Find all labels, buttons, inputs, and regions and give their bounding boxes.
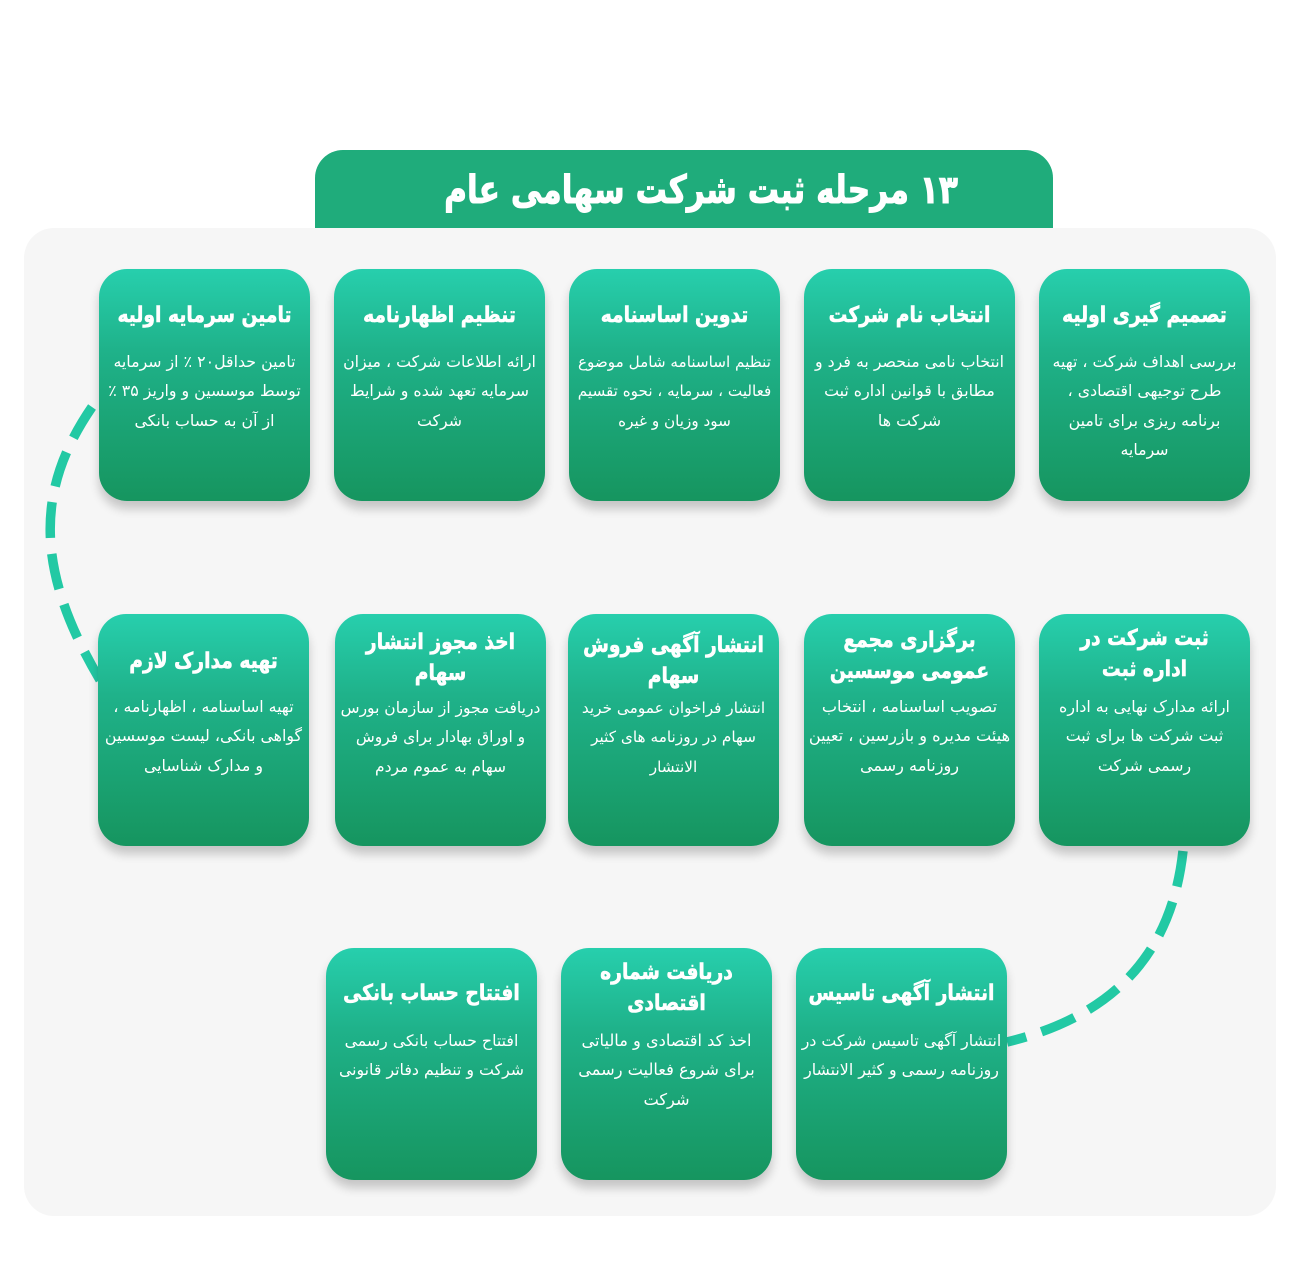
- card 5 heading: تامین سرمایه اولیه: [117, 303, 292, 328]
- card 6 text: ارائه مدارک نهایی به اداره: [1059, 697, 1230, 716]
- card 4 text: [343, 352, 536, 430]
- card 7 text: تصویب اساسنامه ، انتخاب: [822, 697, 997, 716]
- card 8 text: انتشار فراخوان عمومی خرید: [582, 699, 765, 717]
- card 2 text: [814, 352, 1004, 430]
- card 7 text: روزنامه رسمی: [860, 756, 959, 775]
- card 8 text: الانتشار: [650, 758, 697, 776]
- card 4 text: شرکت: [417, 411, 462, 430]
- card 12 text: برای شروع فعالیت رسمی: [578, 1060, 755, 1079]
- card 5 text: [108, 352, 301, 430]
- card 12 text: شرکت: [643, 1090, 690, 1109]
- card 8 heading: انتشار آگهی فروش: [583, 633, 764, 658]
- card 6 heading: [1079, 626, 1209, 682]
- card 8: sale notice: [568, 614, 779, 846]
- card 5: initial capital: [99, 269, 310, 501]
- card 6 heading: اداره ثبت: [1102, 656, 1187, 682]
- card 12 text: [578, 1031, 755, 1109]
- card 9 text: [341, 699, 540, 776]
- card 7 heading: برگزاری مجمع: [843, 628, 976, 653]
- card 5 text: توسط موسسین و واریز ۳۵ ٪: [108, 381, 301, 400]
- connector: row 1 to row 2: [50, 407, 100, 680]
- card 7: general assembly: [804, 614, 1015, 846]
- card 9 heading: سهام: [415, 660, 466, 686]
- card 3 text: سود وزیان و غیره: [618, 412, 731, 430]
- card 12 text: اخذ کد اقتصادی و مالیاتی: [582, 1031, 751, 1050]
- card 12: economic number: [561, 948, 772, 1180]
- card 4 text: ارائه اطلاعات شرکت ، میزان: [343, 352, 536, 371]
- card 9 text: و اوراق بهادار برای فروش: [356, 728, 525, 746]
- card 6 text: رسمی شرکت: [1098, 756, 1191, 775]
- card 10 text: گواهی بانکی، لیست موسسین: [105, 726, 302, 745]
- card 1 text: برنامه ریزی برای تامین: [1069, 411, 1220, 430]
- card 3: articles of association: [569, 269, 780, 501]
- card 8 heading: سهام: [648, 664, 699, 688]
- card 10 text: تهیه اساسنامه ، اظهارنامه ،: [113, 697, 294, 716]
- card 1 heading: تصمیم گیری اولیه: [1062, 303, 1227, 328]
- card 12 heading: اقتصادی: [627, 990, 706, 1016]
- card 9 text: سهام به عموم مردم: [375, 758, 506, 776]
- card 11 text: انتشار آگهی تاسیس شرکت در: [802, 1031, 1001, 1050]
- card 2 heading: انتخاب نام شرکت: [829, 303, 990, 328]
- card 6 text: [1059, 697, 1230, 775]
- card 1 text: طرح توجیهی اقتصادی ،: [1068, 381, 1221, 400]
- card 4 heading: تنظیم اظهارنامه: [363, 303, 516, 328]
- card 8 text: [582, 699, 765, 776]
- card 13 text: شرکت و تنظیم دفاتر قانونی: [339, 1060, 524, 1079]
- card 3 text: تنظیم اساسنامه شامل موضوع: [578, 353, 771, 371]
- card 1 text: سرمایه: [1120, 440, 1169, 459]
- card 2 text: شرکت ها: [878, 411, 941, 430]
- card 11 heading: انتشار آگهی تاسیس: [809, 981, 994, 1006]
- card 2: company name: [804, 269, 1015, 501]
- card 11: founding notice: [796, 948, 1007, 1180]
- card 7 heading: عمومی موسسین: [830, 658, 989, 684]
- card 9 text: دریافت مجوز از سازمان بورس: [341, 699, 540, 717]
- card 1 text: بررسی اهداف شرکت ، تهیه: [1052, 352, 1236, 371]
- card 7 text: هیئت مدیره و بازرسین ، تعیین: [809, 726, 1010, 745]
- card 1: initial decision: [1039, 269, 1250, 501]
- card 7 heading: [830, 626, 989, 684]
- card 8 heading: [583, 630, 764, 689]
- card 4 text: سرمایه تعهد شده و شرایط: [350, 381, 529, 400]
- card 10 text: [105, 697, 302, 775]
- card 3 text: فعالیت ، سرمایه ، نحوه تقسیم: [578, 382, 771, 400]
- card 9 heading: [364, 630, 515, 686]
- connector: row 2 to row 3: [1007, 851, 1183, 1042]
- card 6 text: ثبت شرکت ها برای ثبت: [1066, 726, 1223, 745]
- card 13 text: افتتاح حساب بانکی رسمی: [345, 1031, 518, 1050]
- card 9 heading: اخذ مجوز انتشار: [366, 630, 515, 655]
- card 3 heading: تدوین اساسنامه: [601, 303, 748, 328]
- card 2 text: انتخاب نامی منحصر به فرد و: [815, 352, 1004, 371]
- card 11 text: روزنامه رسمی و کثیر الانتشار: [804, 1060, 999, 1079]
- card 7 text: [809, 697, 1010, 775]
- title: ۱۳ مرحله ثبت شرکت سهامی عام: [444, 168, 958, 213]
- card 5 text: تامین حداقل۲۰ ٪ از سرمایه: [113, 352, 296, 371]
- card 2 text: مطابق با قوانین اداره ثبت: [824, 381, 995, 400]
- card 13 heading: افتتاح حساب بانکی: [343, 981, 520, 1006]
- card 9: publication permit: [335, 614, 546, 846]
- card 1 text: [1052, 352, 1236, 459]
- card 4: declaration: [334, 269, 545, 501]
- card 6 heading: ثبت شرکت در: [1080, 626, 1209, 651]
- card 10: documents: [98, 614, 309, 846]
- card 11 text: [801, 1031, 1001, 1079]
- card 12 heading: دریافت شماره: [600, 960, 733, 985]
- title tab: [315, 150, 1053, 228]
- card 8 text: سهام در روزنامه های کثیر: [591, 728, 756, 746]
- card 10 heading: تهیه مدارک لازم: [129, 649, 278, 674]
- card 6: registration office: [1039, 614, 1250, 846]
- background panel: [24, 228, 1276, 1216]
- card 5 text: از آن به حساب بانکی: [134, 411, 274, 430]
- card 3 text: [578, 353, 771, 430]
- card 10 text: و مدارک شناسایی: [144, 756, 263, 775]
- card 12 heading: [600, 960, 733, 1016]
- card 13 text: [339, 1031, 524, 1079]
- card 13: bank account: [326, 948, 537, 1180]
